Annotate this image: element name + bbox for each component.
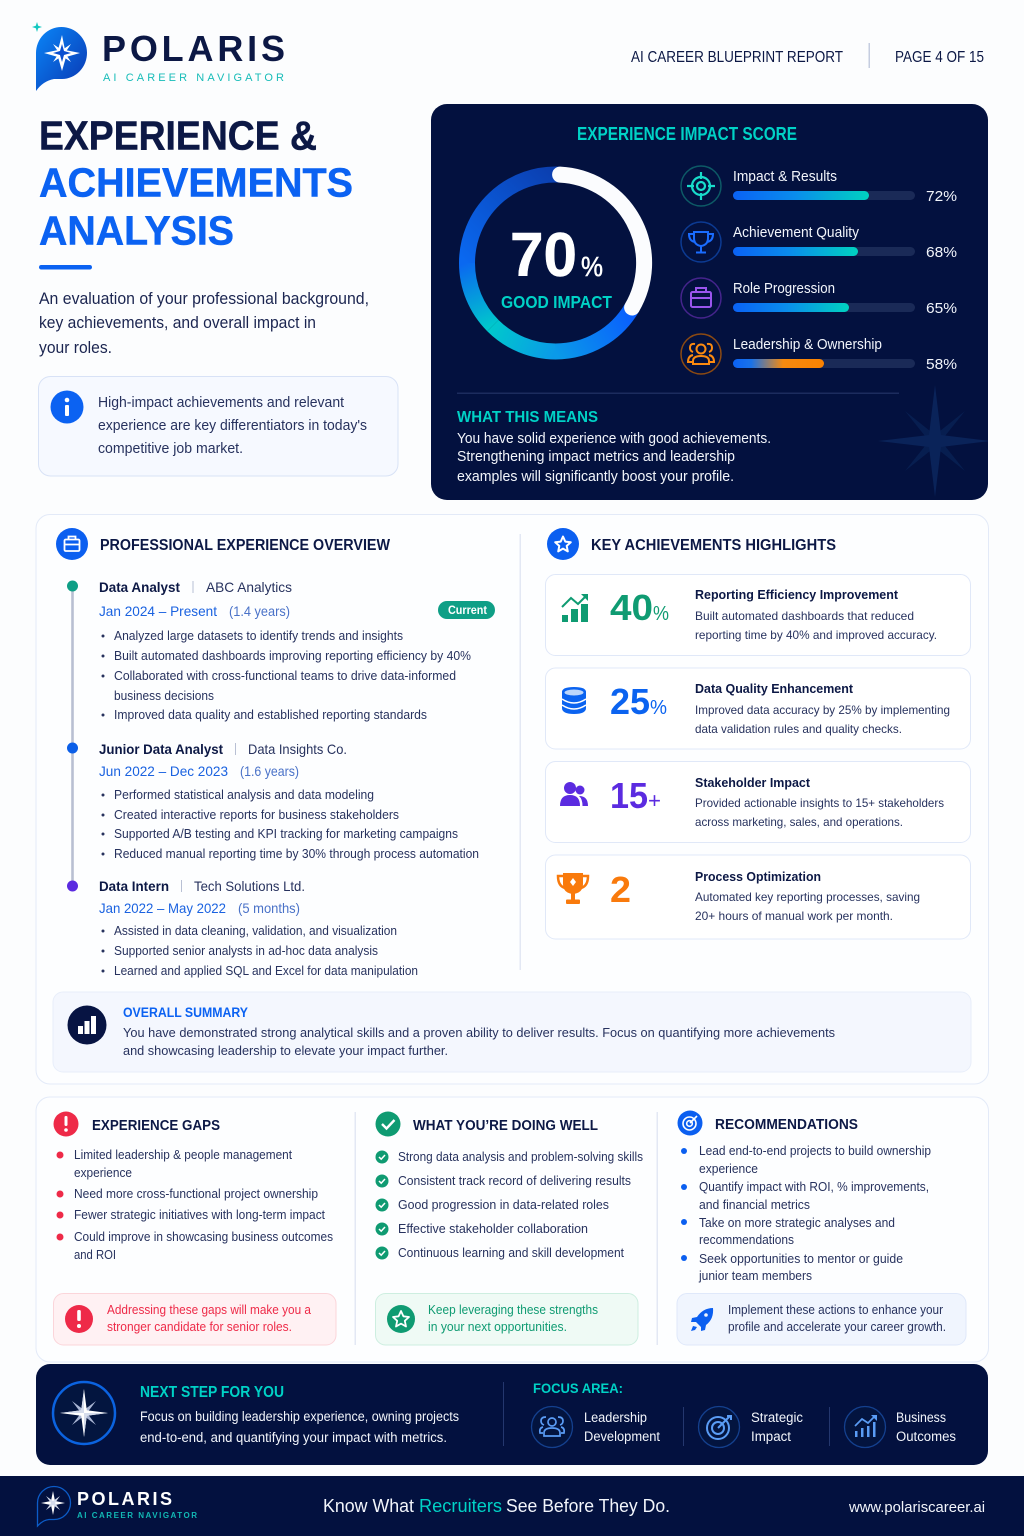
column: recommendations: experience — [699, 1162, 758, 1176]
job: data analyst: ABC Analytics — [206, 579, 292, 595]
section: professional experience — [56, 528, 495, 978]
icon: database — [562, 687, 586, 714]
column: doing well: Effective stakeholder collaboration — [398, 1222, 588, 1236]
footer — [0, 1476, 1024, 1536]
card: process optimization: Process Optimization — [695, 869, 821, 884]
website: www.polariscareer.ai — [848, 1500, 985, 1516]
job: data intern: (5 months) — [238, 900, 300, 916]
text: what this means: WHAT THIS MEANS — [457, 409, 598, 426]
text: next step: Focus on building leadership experience, owning projects — [140, 1409, 459, 1424]
timeline — [67, 580, 78, 892]
section: key achievements — [546, 528, 970, 939]
column: doing well: Good progression in data-related roles — [398, 1198, 609, 1212]
column: doing well: WHAT YOU’RE DOING WELL — [413, 1118, 598, 1134]
job: junior data analyst: Performed statistical analysis and data modeling — [114, 788, 374, 802]
header logo: POLARIS — [102, 28, 285, 69]
text: next step: end-to-end, and quantifying your impact with metrics. — [140, 1430, 447, 1445]
column: recommendations: Lead end-to-end projects to build ownership — [699, 1144, 931, 1158]
card: data quality: Data Quality Enhancement — [695, 681, 854, 696]
card: process optimization: 20+ hours of manual work per month. — [695, 909, 893, 923]
column: recommendations: Quantify impact with ROI, % improvements, — [699, 1180, 929, 1194]
card: data quality: data validation rules and quality checks. — [695, 722, 902, 736]
job: data intern — [99, 878, 418, 978]
info callout — [38, 376, 398, 476]
tagline — [323, 1496, 670, 1516]
title — [39, 112, 353, 270]
header logo: AI CAREER NAVIGATOR — [103, 72, 284, 84]
column: experience gaps: EXPERIENCE GAPS — [92, 1118, 220, 1134]
card: reporting efficiency: Built automated dashboards that reduced — [695, 609, 914, 623]
card: stakeholder impact: Provided actionable insights to 15+ stakeholders — [695, 796, 944, 810]
column: doing well: Consistent track record of delivering results — [398, 1174, 631, 1188]
focus: strategic impact: Impact — [751, 1429, 791, 1444]
card: process optimization: Automated key reporting processes, saving — [695, 890, 920, 904]
card: data quality: 25 — [610, 681, 650, 722]
card: data quality — [546, 668, 970, 749]
overall summary — [53, 992, 971, 1072]
icon: trophy — [558, 873, 588, 904]
job: junior data analyst: Supported A/B testing and KPI tracking for marketing campaigns — [114, 827, 458, 841]
job: junior data analyst — [99, 741, 479, 861]
column: doing well: Continuous learning and skill development — [398, 1246, 625, 1260]
callout: gaps — [54, 1294, 336, 1345]
icon: growth chart — [562, 594, 588, 622]
metric: role progression: Role Progression — [733, 281, 835, 297]
callout: gaps: stronger candidate for senior roles. — [107, 1320, 292, 1334]
focus: strategic impact — [698, 1406, 803, 1448]
icon: compass — [53, 1382, 115, 1444]
card: stakeholder impact — [546, 762, 970, 842]
panel: gaps, strengths, recommendations — [36, 1097, 988, 1362]
column: recommendations: Take on more strategic analyses and — [699, 1216, 895, 1230]
focus: leadership: Development — [584, 1429, 660, 1444]
focus: business outcomes — [844, 1406, 956, 1448]
job: data analyst — [99, 579, 495, 722]
metric: role progression: 65% — [926, 300, 957, 317]
card: reporting efficiency — [546, 574, 970, 656]
job: junior data analyst: Data Insights Co. — [248, 741, 347, 757]
card: stakeholder impact: across marketing, sales, and operations. — [695, 815, 903, 829]
job: junior data analyst: Created interactive reports for business stakeholders — [114, 808, 399, 822]
column: experience gaps: experience — [74, 1166, 132, 1180]
tagline: See Before They Do. — [506, 1496, 670, 1516]
job: junior data analyst: Jun 2022 – Dec 2023 — [99, 763, 228, 779]
column: recommendations: RECOMMENDATIONS — [715, 1117, 858, 1133]
header report info — [631, 43, 984, 68]
chart: score ring: % — [581, 251, 603, 282]
overall summary: You have demonstrated strong analytical skills and a proven ability to deliver results. Focus on quantifying more achievements — [123, 1026, 835, 1040]
job: data intern: Tech Solutions Ltd. — [194, 878, 305, 894]
callout: actions: Implement these actions to enhance your — [728, 1303, 943, 1317]
badge: current — [438, 601, 495, 619]
metric: achievement quality: Achievement Quality — [733, 225, 860, 241]
column: experience gaps: Need more cross-functional project ownership — [74, 1187, 318, 1201]
header report info: AI CAREER BLUEPRINT REPORT — [631, 49, 843, 66]
info callout: experience are key differentiators in today's — [98, 418, 367, 434]
card: reporting efficiency: reporting time by 40% and improved accuracy. — [695, 628, 937, 642]
text: what this means: You have solid experience with good achievements. — [457, 431, 771, 447]
icon: bars — [68, 1006, 106, 1044]
text: what this means: examples will significantly boost your profile. — [457, 469, 734, 485]
focus: leadership — [532, 1406, 660, 1448]
intro text — [39, 290, 369, 357]
metric: achievement quality — [681, 222, 957, 262]
callout: gaps: Addressing these gaps will make you a — [107, 1303, 311, 1317]
column: experience gaps — [54, 1112, 336, 1345]
job: junior data analyst: Reduced manual reporting time by 30% through process automation — [114, 847, 479, 861]
footer logo: POLARIS — [77, 1489, 172, 1509]
panel: next step — [36, 1364, 988, 1465]
badge: current: Current — [448, 605, 487, 617]
column: experience gaps: Could improve in showcasing business outcomes — [74, 1230, 333, 1244]
job: data analyst: Data Analyst — [99, 579, 180, 595]
intro text: An evaluation of your professional background, — [39, 290, 369, 308]
metric: achievement quality: 68% — [926, 244, 957, 261]
focus: strategic impact: Strategic — [751, 1410, 803, 1425]
job: data intern: Supported senior analysts in ad-hoc data analysis — [114, 944, 378, 958]
icon: alert — [54, 1112, 78, 1136]
chart: score ring: 70 — [510, 221, 577, 290]
text: next step — [140, 1384, 459, 1445]
column: doing well: Strong data analysis and problem-solving skills — [398, 1150, 643, 1164]
section: professional experience: PROFESSIONAL EXPERIENCE OVERVIEW — [100, 537, 391, 554]
focus areas: FOCUS AREA: — [533, 1380, 623, 1396]
callout: actions: profile and accelerate your career growth. — [728, 1320, 946, 1334]
column: recommendations — [677, 1110, 966, 1345]
overall summary: and showcasing leadership to elevate your impact further. — [123, 1044, 448, 1058]
card: process optimization: 2 — [610, 869, 631, 910]
icon: check — [376, 1112, 400, 1136]
metric: leadership and ownership: Leadership & Ownership — [733, 337, 882, 353]
metric: role progression — [681, 278, 957, 318]
column: experience gaps: and ROI — [74, 1248, 116, 1262]
metric: impact and results — [681, 166, 957, 206]
column: experience gaps: Fewer strategic initiatives with long-term impact — [74, 1208, 325, 1222]
text: what this means: Strengthening impact metrics and leadership — [457, 449, 735, 465]
card: stakeholder impact: Stakeholder Impact — [695, 775, 811, 790]
job: data intern: Assisted in data cleaning, validation, and visualization — [114, 924, 397, 938]
job: data analyst: Collaborated with cross-functional teams to drive data-informed — [114, 669, 456, 683]
text: what this means — [457, 409, 771, 485]
footer logo: AI CAREER NAVIGATOR — [77, 1511, 197, 1520]
column: recommendations: and financial metrics — [699, 1198, 810, 1212]
job: data intern: Jan 2022 – May 2022 — [99, 900, 226, 916]
job: data intern: Data Intern — [99, 878, 169, 894]
intro text: your roles. — [39, 339, 112, 357]
title: ACHIEVEMENTS — [39, 160, 353, 206]
section: key achievements: KEY ACHIEVEMENTS HIGHLIGHTS — [591, 537, 836, 554]
icon: people — [560, 782, 588, 806]
column: recommendations: recommendations — [699, 1233, 794, 1247]
overall summary: OVERALL SUMMARY — [123, 1005, 248, 1020]
title: EXPERIENCE & — [39, 112, 317, 158]
job: data analyst: Jan 2024 – Present — [99, 603, 217, 619]
job: data analyst: Improved data quality and established reporting standards — [114, 708, 427, 722]
info callout: High-impact achievements and relevant — [98, 395, 344, 411]
focus: leadership: Leadership — [584, 1410, 647, 1425]
callout: actions — [677, 1294, 966, 1345]
metric: leadership and ownership: 58% — [926, 356, 957, 373]
metric: impact and results: 72% — [926, 188, 957, 205]
job: junior data analyst: Junior Data Analyst — [99, 741, 223, 757]
chart: score ring: GOOD IMPACT — [501, 292, 612, 312]
job: data intern: Learned and applied SQL and Excel for data manipulation — [114, 964, 418, 978]
header logo — [32, 22, 285, 91]
tagline: Recruiters — [419, 1496, 502, 1516]
panel: experience impact score — [431, 104, 990, 500]
callout: strengths — [376, 1294, 638, 1345]
icon: target — [678, 1110, 702, 1136]
tagline: Know What — [323, 1496, 414, 1516]
card: stakeholder impact: + — [648, 788, 661, 813]
card: process optimization — [546, 855, 970, 939]
compass watermark — [878, 385, 990, 497]
header report info: PAGE 4 OF 15 — [895, 49, 984, 66]
focus: business outcomes: Business — [896, 1410, 946, 1425]
job: data analyst: business decisions — [114, 689, 214, 703]
chart: score ring — [467, 174, 644, 352]
job: data analyst: (1.4 years) — [229, 603, 290, 619]
job: data analyst: Analyzed large datasets to identify trends and insights — [114, 629, 403, 643]
column: recommendations: junior team members — [698, 1269, 812, 1283]
panel: experience and achievements — [36, 514, 988, 1084]
callout: strengths: Keep leveraging these strengths — [428, 1303, 598, 1317]
column: recommendations: Seek opportunities to mentor or guide — [699, 1252, 903, 1266]
icon: polaris pin — [32, 22, 87, 91]
card: data quality: Improved data accuracy by 25% by implementing — [695, 703, 950, 717]
intro text: key achievements, and overall impact in — [39, 314, 316, 332]
icon: info — [50, 390, 84, 424]
title: ANALYSIS — [39, 208, 234, 254]
focus: business outcomes: Outcomes — [896, 1429, 956, 1444]
heading: score: EXPERIENCE IMPACT SCORE — [577, 124, 797, 144]
card: reporting efficiency: % — [653, 603, 669, 625]
metric: impact and results: Impact & Results — [733, 169, 837, 185]
callout: strengths: in your next opportunities. — [428, 1320, 567, 1334]
focus areas — [532, 1380, 956, 1448]
card: data quality: % — [650, 697, 667, 719]
metric: leadership and ownership — [681, 334, 957, 374]
column: experience gaps: Limited leadership & people management — [74, 1148, 292, 1162]
column: doing well — [376, 1112, 643, 1345]
footer logo — [38, 1486, 197, 1526]
info callout: competitive job market. — [98, 441, 243, 457]
card: reporting efficiency: Reporting Efficiency Improvement — [695, 587, 899, 602]
card: reporting efficiency: 40 — [610, 587, 653, 628]
icon: briefcase — [56, 528, 88, 560]
card: stakeholder impact: 15 — [610, 775, 648, 816]
icon: star — [547, 528, 579, 560]
job: data analyst: Built automated dashboards improving reporting efficiency by 40% — [114, 649, 471, 663]
text: next step: NEXT STEP FOR YOU — [140, 1384, 284, 1401]
job: junior data analyst: (1.6 years) — [240, 763, 299, 779]
